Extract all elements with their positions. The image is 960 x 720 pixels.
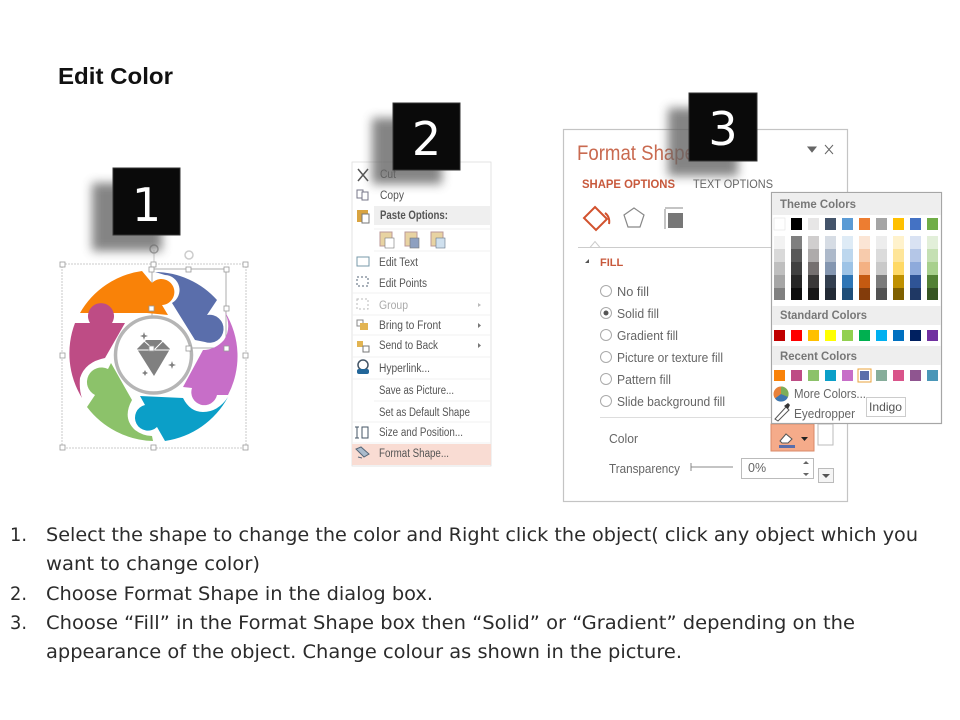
menu labels: Paste Options: — [380, 210, 448, 222]
puzzle piece: orange — [80, 271, 174, 315]
badge: step 1: 1 — [132, 178, 161, 232]
text block: instructions: Choose “Fill” in the Format Shape box then “Solid” or “Gradient” depending on the — [46, 612, 855, 634]
eyedropper: Eyedropper — [794, 407, 855, 421]
tooltip: Indigo — [866, 398, 906, 416]
menu labels: Group — [379, 300, 408, 312]
puzzle piece: green — [87, 363, 153, 441]
dialog controls — [808, 145, 833, 154]
centre circle — [116, 317, 192, 393]
menu labels: Set as Default Shape — [379, 407, 470, 419]
color row — [609, 424, 833, 451]
text block: instructions: appearance of the object. Change colour as shown in the picture. — [46, 641, 682, 663]
fill section — [585, 257, 623, 269]
menu icons — [355, 169, 445, 458]
more colours: More Colors... — [794, 387, 866, 401]
title: Edit Color — [58, 63, 173, 89]
standard colour row — [774, 330, 938, 341]
selection frame — [62, 250, 246, 448]
badge: step 3: 3 — [708, 102, 738, 156]
theme colour row — [774, 218, 938, 230]
text block: instructions: want to change color) — [46, 553, 260, 575]
tooltip: Indigo: Indigo — [869, 400, 902, 414]
dialog tabs: SHAPE OPTIONS — [582, 179, 675, 191]
text block: instructions: 3. — [10, 612, 27, 634]
transparency row — [609, 458, 834, 482]
panel: puzzle ring with selection handles — [60, 245, 248, 450]
menu labels: Format Shape... — [379, 448, 449, 460]
menu labels: Edit Points — [379, 278, 427, 290]
fill radio options: Solid fill — [617, 307, 659, 321]
menu labels: Edit Text — [379, 257, 419, 269]
selection handles — [60, 245, 248, 450]
transparency row: Transparency — [609, 462, 681, 476]
badge: step 2: 2 — [412, 112, 441, 166]
theme colour shades — [774, 236, 938, 300]
fill radio options: Slide background fill — [617, 395, 725, 409]
fill radio options: No fill — [617, 285, 649, 299]
picker headings: Recent Colors — [780, 351, 857, 363]
fill section: FILL — [600, 257, 623, 269]
picker headings: Standard Colors — [780, 310, 867, 322]
picker headings — [780, 199, 867, 363]
menu labels: Bring to Front — [379, 320, 442, 332]
puzzle piece: purple — [183, 312, 238, 405]
text block: instructions: Select the shape to change the color and Right click the object( click any object which you — [46, 524, 918, 546]
menu arrows and dividers — [352, 229, 491, 443]
text block: instructions: 2. — [10, 583, 27, 605]
text block: instructions — [10, 524, 918, 663]
transparency row: 0% — [748, 461, 766, 475]
section divider — [578, 242, 771, 248]
icon: diamond — [137, 332, 176, 376]
eyedropper — [775, 403, 855, 421]
panel: format shape dialog — [564, 130, 848, 502]
fill radio options: Picture or texture fill — [617, 351, 723, 365]
fill radio options: Pattern fill — [617, 373, 671, 387]
puzzle piece: magenta — [69, 303, 125, 398]
dialog title: Format Shape — [577, 142, 695, 165]
menu labels: Hyperlink... — [379, 363, 430, 375]
menu labels: Send to Back — [379, 340, 438, 352]
puzzle piece: cyan — [135, 396, 228, 441]
color row: Color — [609, 432, 638, 446]
dialog tabs: TEXT OPTIONS — [693, 179, 773, 191]
picker headings: Theme Colors — [780, 199, 856, 211]
menu labels — [379, 169, 470, 460]
menu labels: Copy — [380, 190, 404, 202]
fill radio options — [600, 285, 725, 409]
badge: step 3 — [668, 93, 757, 176]
panel: context menu — [352, 162, 491, 466]
text block: instructions: Choose Format Shape in the dialog box. — [46, 583, 433, 605]
dialog tab icons — [584, 207, 683, 230]
panel: colour picker — [772, 192, 942, 424]
badge: step 1 — [92, 168, 180, 251]
more colours — [774, 386, 866, 402]
menu labels: Save as Picture... — [379, 385, 454, 397]
menu highlight rows — [352, 206, 491, 465]
badge: step 2 — [372, 103, 460, 184]
menu labels: Size and Position... — [379, 427, 463, 439]
dialog tabs — [582, 179, 773, 191]
fill radio options: Gradient fill — [617, 329, 678, 343]
menu labels: Cut — [380, 169, 397, 181]
puzzle piece: indigo — [155, 272, 224, 343]
recent colour row — [774, 369, 938, 382]
text block: instructions: 1. — [10, 524, 27, 546]
picker header bands — [772, 193, 941, 365]
